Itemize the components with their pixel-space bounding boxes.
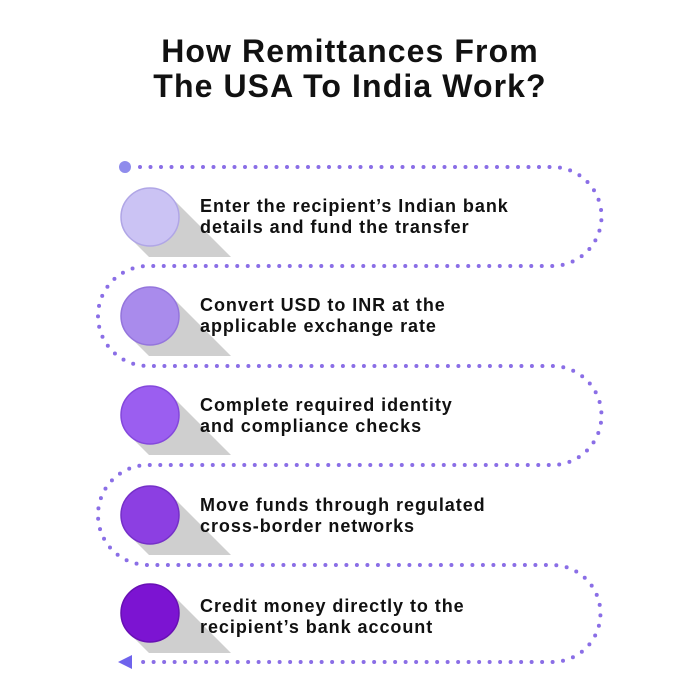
step 1 text: Enter the recipient’s Indian bank xyxy=(200,196,509,216)
step 5 text: Credit money directly to the xyxy=(200,596,465,616)
step 5 text: recipient’s bank account xyxy=(200,617,433,637)
step 5 text xyxy=(200,596,465,637)
step circle 5 xyxy=(121,584,231,653)
step 4 text: cross-border networks xyxy=(200,516,415,536)
title: How Remittances From xyxy=(161,33,539,69)
step 4 text: Move funds through regulated xyxy=(200,495,486,515)
step circle 4 xyxy=(121,486,231,555)
step 3 text xyxy=(200,395,453,436)
title: The USA To India Work? xyxy=(153,68,547,104)
step 4 text xyxy=(200,495,486,536)
step circle 1 xyxy=(121,188,231,257)
step circle 3 xyxy=(121,386,231,455)
step circle 2 xyxy=(121,287,231,356)
arrow head end xyxy=(118,655,132,669)
step 1 text xyxy=(200,196,509,237)
step 2 text: Convert USD to INR at the xyxy=(200,295,446,315)
step 1 text: details and fund the transfer xyxy=(200,217,470,237)
dotted winding path xyxy=(98,161,602,662)
step 2 text xyxy=(200,295,446,336)
step 3 text: and compliance checks xyxy=(200,416,422,436)
step 3 text: Complete required identity xyxy=(200,395,453,415)
title xyxy=(153,33,547,104)
step 2 text: applicable exchange rate xyxy=(200,316,437,336)
